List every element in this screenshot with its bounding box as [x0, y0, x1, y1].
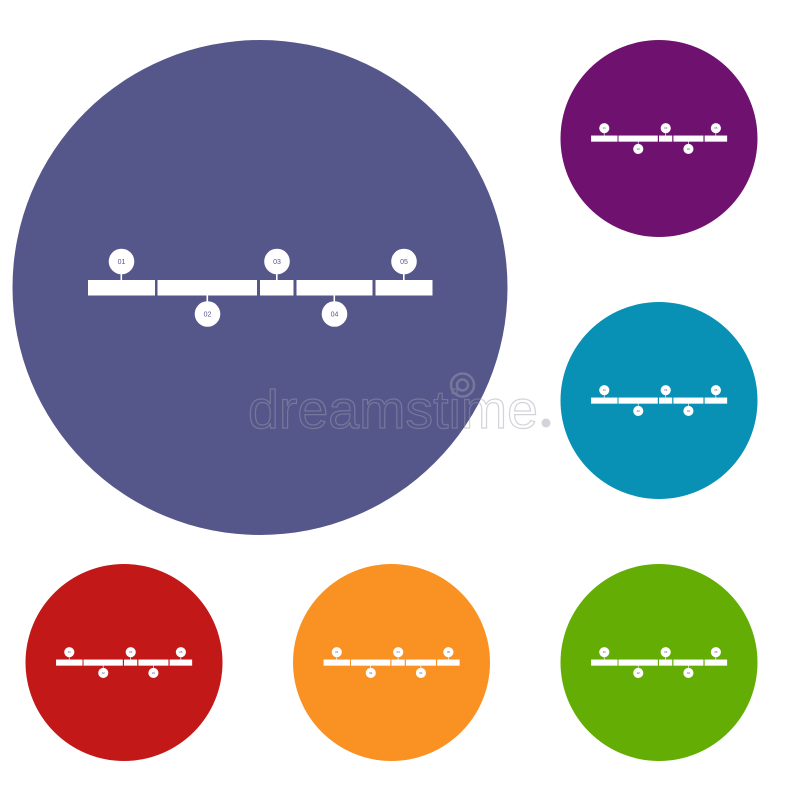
- large indigo circle icon: [12, 40, 508, 535]
- timeline: large: 05: [400, 259, 408, 266]
- timeline: red: 04: [152, 671, 155, 675]
- timeline: red: 05: [179, 650, 183, 654]
- timeline: purple: 02: [637, 147, 640, 151]
- timeline: blue: 04: [687, 409, 690, 413]
- timeline: orange: 03: [397, 650, 400, 654]
- timeline: orange: 01: [335, 650, 339, 654]
- timeline: purple: [591, 123, 727, 154]
- timeline: red: 02: [102, 671, 105, 675]
- timeline: red: 03: [129, 650, 133, 654]
- timeline: purple: 01: [603, 126, 606, 130]
- timeline: large: 01: [118, 259, 125, 266]
- blue circle icon: [560, 302, 758, 499]
- timeline: large: [88, 249, 432, 327]
- purple circle icon: [560, 40, 758, 237]
- orange circle icon: [293, 564, 490, 761]
- timeline: purple: 03: [664, 126, 668, 130]
- timeline: green: 03: [664, 650, 668, 654]
- timeline: blue: 05: [714, 388, 718, 392]
- timeline: orange: 04: [419, 671, 423, 675]
- timeline: orange: 02: [369, 671, 373, 675]
- watermark: dreamstime: [248, 380, 538, 440]
- timeline: green: 02: [637, 671, 640, 675]
- timeline: red: [56, 647, 192, 678]
- timeline: blue: 03: [664, 388, 668, 392]
- timeline: purple: 04: [687, 147, 690, 151]
- green circle icon: [560, 564, 758, 761]
- timeline: blue: [591, 385, 727, 416]
- timeline: large: 02: [204, 312, 211, 318]
- timeline: orange: 05: [447, 650, 450, 654]
- timeline: purple: 05: [714, 126, 718, 130]
- timeline: green: 01: [603, 650, 606, 654]
- timeline: large: 03: [273, 259, 281, 266]
- red circle icon: [26, 564, 222, 761]
- timeline: green: 05: [714, 650, 718, 654]
- timeline: red: 01: [68, 650, 71, 654]
- timeline: green: [591, 647, 727, 678]
- timeline: large: 04: [331, 312, 338, 318]
- timeline: blue: 01: [603, 388, 606, 392]
- timeline: green: 04: [687, 671, 690, 675]
- timeline: orange: [324, 647, 460, 678]
- timeline: blue: 02: [637, 409, 640, 413]
